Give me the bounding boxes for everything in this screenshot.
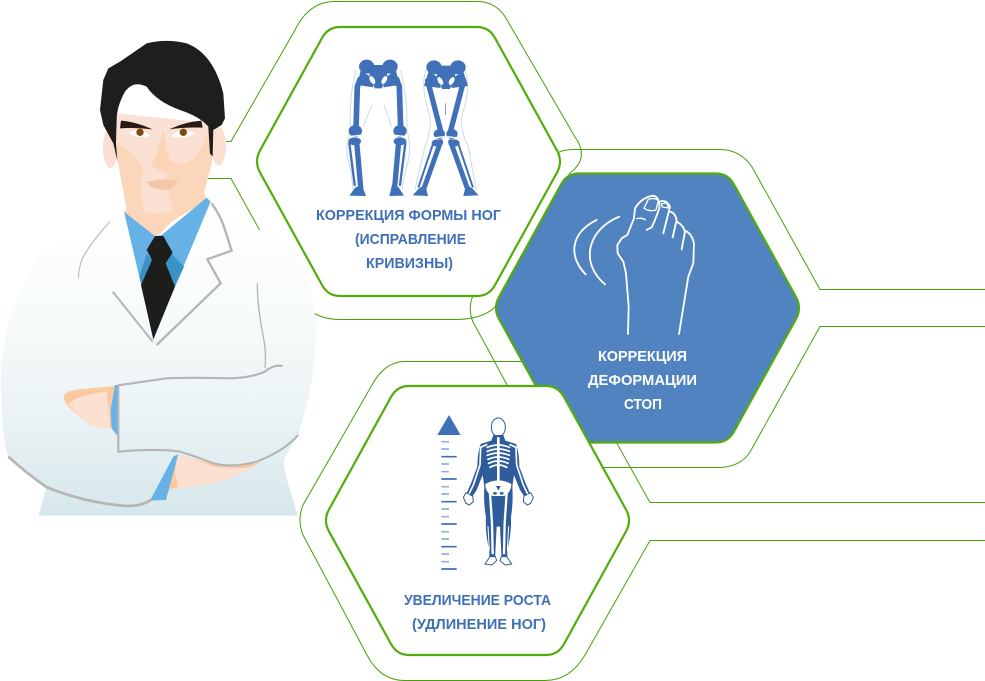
hands <box>463 493 533 505</box>
icon: foot <box>574 196 694 334</box>
heading: leg shape correction: КОРРЕКЦИЯ ФОРМЫ НОГ <box>316 207 501 224</box>
panel: leg shape correction <box>257 27 560 296</box>
heading: leg shape correction <box>316 207 501 272</box>
heading: leg shape correction: КРИВИЗНЫ) <box>366 255 453 272</box>
heading: foot deformity correction: КОРРЕКЦИЯ <box>598 348 687 365</box>
outline: top hexagon <box>208 2 581 320</box>
icon: up arrow <box>437 415 461 435</box>
eyebrows <box>120 121 203 129</box>
mouth <box>146 179 178 190</box>
feet <box>485 557 512 565</box>
heading: height increase: (УДЛИНЕНИЕ НОГ) <box>412 616 546 633</box>
shirt shadow <box>139 254 184 287</box>
icon: skeleton figure <box>463 418 533 565</box>
coat sleeve outlines <box>8 366 298 506</box>
hexagon frame <box>326 386 629 655</box>
icon: leg skeletons <box>347 60 479 196</box>
left hand <box>63 385 119 435</box>
height scale ticks <box>441 442 457 569</box>
heading: foot deformity correction <box>588 348 697 413</box>
eyes <box>128 129 195 137</box>
illustration: doctor <box>1 41 316 516</box>
hair <box>100 41 225 161</box>
tie <box>141 236 175 339</box>
outline: bottom hexagon <box>300 362 985 680</box>
panel: foot deformity correction <box>496 174 799 442</box>
hexagon frame <box>496 174 799 442</box>
hexagon frame <box>257 27 560 296</box>
coat <box>1 202 316 516</box>
coat lapels and folds <box>78 203 266 368</box>
heading: foot deformity correction: СТОП <box>624 396 662 413</box>
shirt <box>124 198 211 340</box>
face highlight <box>117 113 213 213</box>
nose <box>152 130 171 169</box>
ears <box>103 127 226 168</box>
face and neck <box>117 113 213 236</box>
panel: height increase <box>326 386 629 655</box>
outline: foot hexagon <box>470 150 985 468</box>
right hand <box>150 454 262 501</box>
heading: height increase: УВЕЛИЧЕНИЕ РОСТА <box>404 592 551 609</box>
icon: height scale and skeleton <box>437 415 533 569</box>
heading: height increase <box>404 592 551 633</box>
heading: leg shape correction: (ИСПРАВЛЕНИЕ <box>355 231 466 248</box>
heading: foot deformity correction: ДЕФОРМАЦИИ <box>588 372 697 389</box>
thin outer connector outlines <box>208 2 985 680</box>
